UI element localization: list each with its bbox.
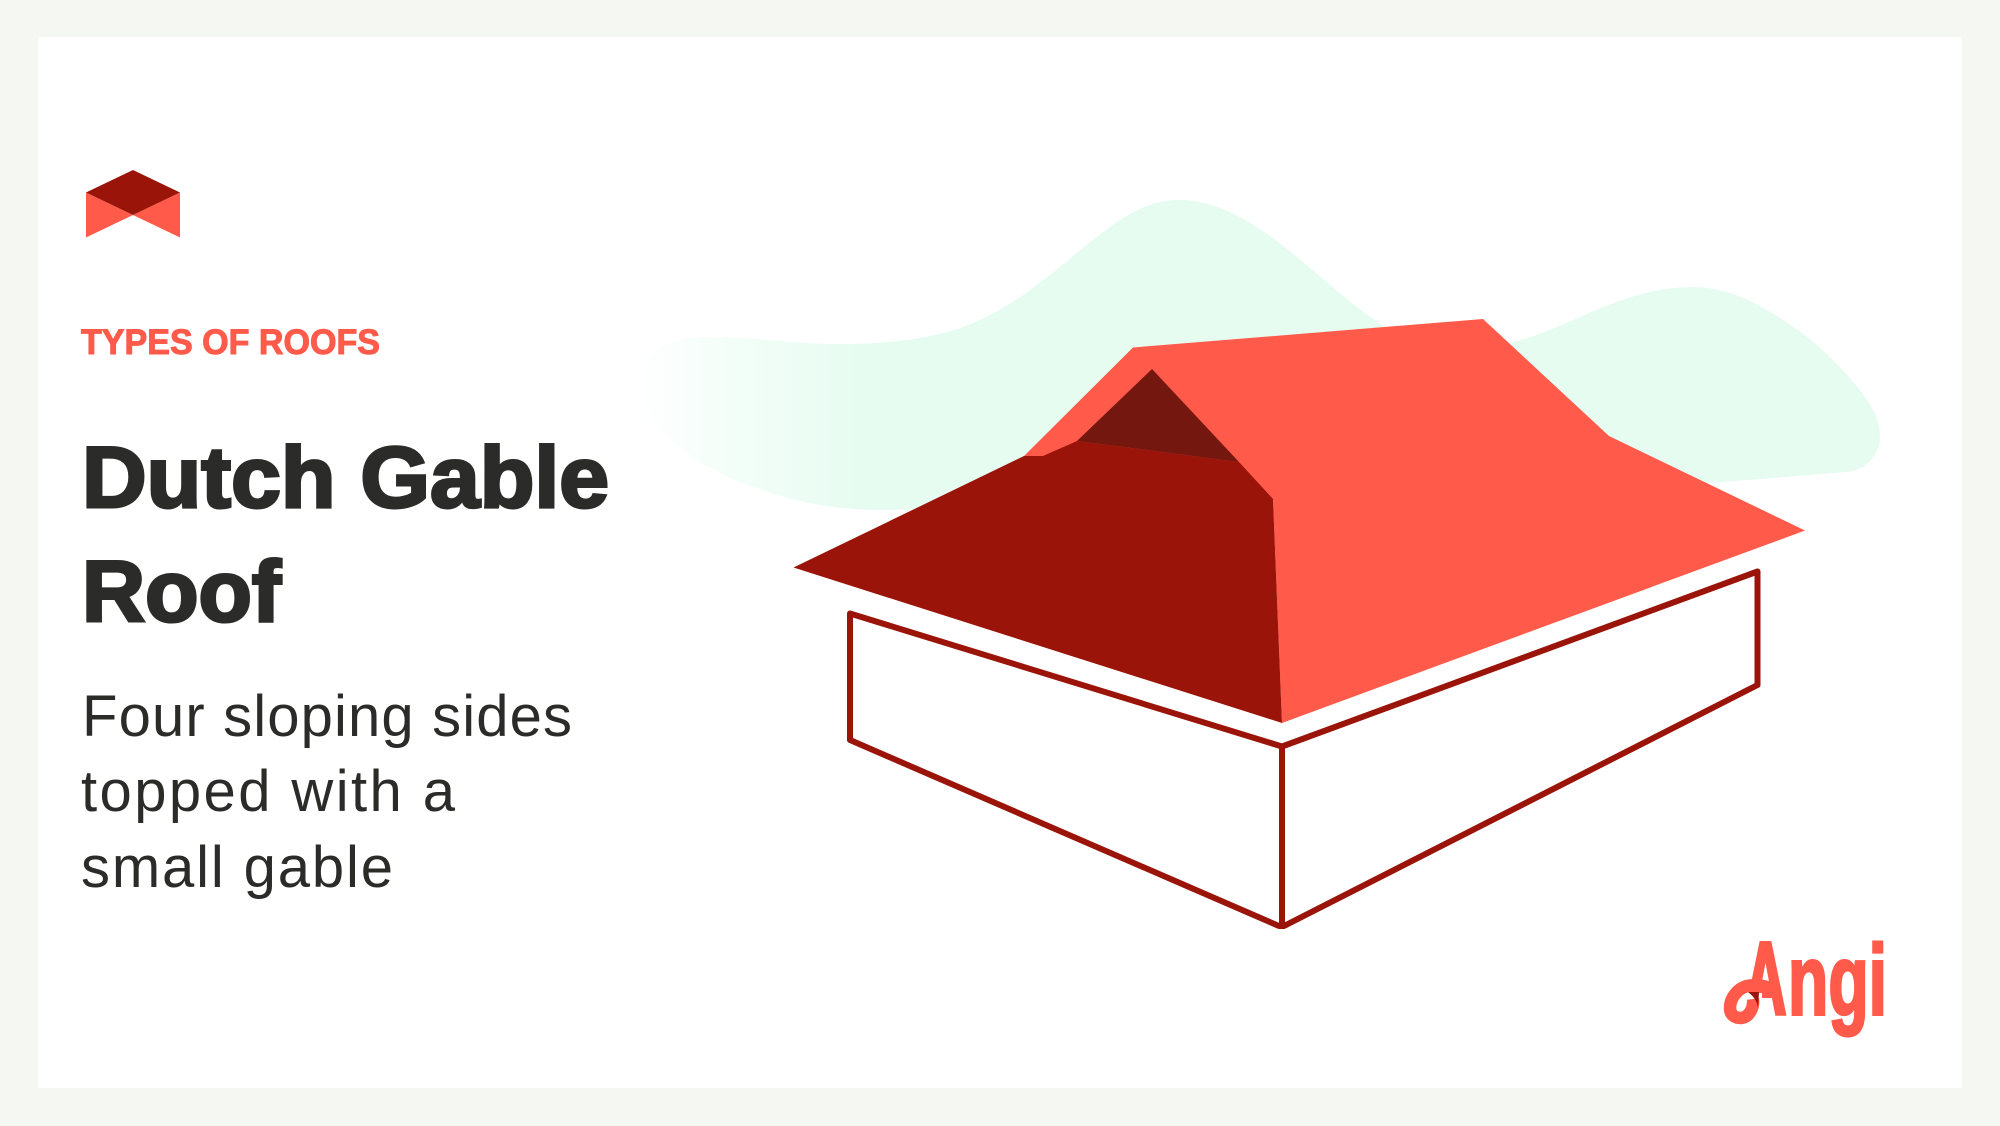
description text: small gable bbox=[81, 835, 393, 900]
icon: roof logo mark bbox=[86, 170, 180, 238]
logo: Angi: A bbox=[1745, 924, 1786, 1036]
eyebrow: types of roofs: TYPES OF ROOFS bbox=[81, 323, 380, 362]
description text: topped with a bbox=[81, 759, 456, 824]
description text bbox=[81, 684, 572, 900]
house walls outline bbox=[850, 572, 1758, 926]
background mint hill blob bbox=[641, 200, 1880, 510]
description text: Four sloping sides bbox=[82, 684, 572, 749]
title: Roof bbox=[82, 544, 281, 640]
title: Dutch Gable bbox=[82, 430, 609, 526]
logo: Angi: ngi bbox=[1788, 924, 1887, 1036]
roof: left dark slope bbox=[794, 441, 1282, 723]
logo: Angi bbox=[1730, 924, 1887, 1036]
title bbox=[82, 430, 609, 640]
roof: right coral slope bbox=[1024, 319, 1805, 723]
roof: gable triangle bbox=[1077, 369, 1239, 462]
dutch gable roof bbox=[794, 319, 1805, 723]
